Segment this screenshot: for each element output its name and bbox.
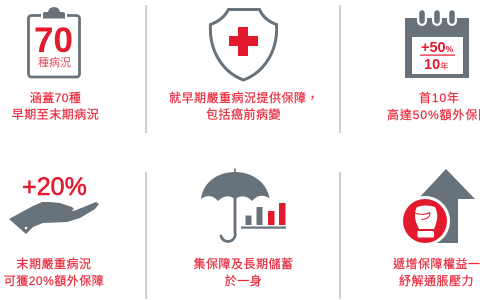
icon: up arrow with boxing glove — [400, 169, 475, 246]
panel: early stage protection — [169, 10, 319, 122]
text: first 10 years up to 50 percent: 首10年 — [419, 91, 460, 105]
text: late stage extra protection: 可獲20%額外保障 — [4, 273, 104, 288]
text: protection and savings: 於一身 — [225, 273, 262, 288]
text: early stage protection: 包括癌前病變 — [206, 106, 281, 122]
icon: clipboard: 種病況 — [38, 55, 71, 69]
icon: umbrella with bar chart — [201, 168, 286, 241]
panel: 70 conditions — [12, 7, 99, 122]
text: coverage of 70 conditions: 涵蓋70種 — [30, 91, 81, 105]
panel: late stage extra 20 percent — [4, 173, 104, 288]
text: inflation relief: 遞增保障權益一 — [393, 256, 480, 271]
text: protection and savings: 集保障及長期儲蓄 — [193, 256, 294, 271]
text: early stage protection: 就早期嚴重病況提供保障， — [169, 90, 319, 105]
icon: clipboard: 70 — [34, 21, 73, 60]
text: late stage extra protection: 末期嚴重病況 — [16, 256, 92, 271]
panel: first 10 years bonus — [387, 12, 480, 122]
icon: calendar: +50% — [421, 40, 454, 56]
text: plus 20 percent: +20% — [22, 173, 87, 201]
icon: calendar — [405, 12, 469, 78]
panel: inflation relief — [393, 169, 480, 288]
panel: protection and savings — [193, 168, 294, 288]
icon: open hand — [9, 202, 99, 234]
icon: clipboard — [28, 7, 80, 77]
text: coverage of 70 conditions: 早期至末期病況 — [12, 106, 99, 122]
icon: shield with cross — [210, 10, 277, 80]
text: inflation relief: 紓解通脹壓力 — [399, 273, 474, 288]
icon: calendar: 10年 — [424, 57, 449, 73]
